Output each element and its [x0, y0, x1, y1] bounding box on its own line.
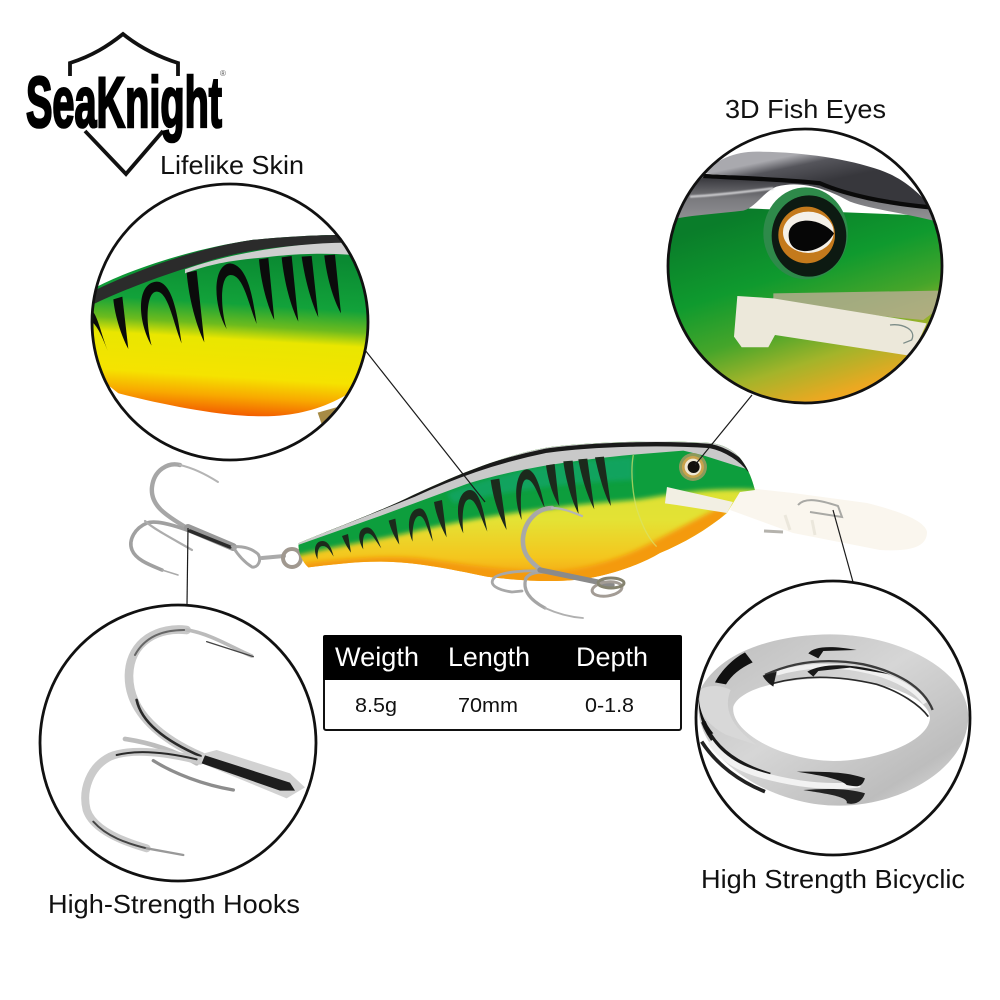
eye green skin	[669, 208, 941, 402]
white mouth tab	[665, 487, 733, 513]
label: Lifelike Skin: Lifelike Skin	[160, 150, 304, 180]
third hook prong	[125, 739, 197, 763]
value: depth: 0-1.8	[585, 695, 634, 717]
header: Length: Length	[448, 642, 530, 672]
eye black line	[703, 176, 930, 207]
header: Depth: Depth	[576, 642, 648, 672]
table header bar	[323, 635, 682, 680]
body stripes	[315, 457, 611, 559]
eye tab seam	[890, 325, 913, 343]
eye gray lower back	[677, 177, 937, 222]
black dorsal line	[301, 444, 750, 539]
eye white tab	[734, 296, 927, 356]
ring end cap shadow	[699, 698, 713, 735]
inset: split ring	[696, 581, 970, 855]
green back band	[293, 437, 760, 557]
eye gray upper back	[703, 152, 932, 208]
upper hook	[129, 630, 202, 757]
ring inner edge line	[773, 677, 928, 717]
skin hook eye detail	[318, 407, 336, 424]
silver back band	[298, 442, 748, 545]
ring lower black marks	[797, 772, 865, 786]
ring lower light band	[710, 742, 860, 786]
value: weight: 8.5g	[355, 695, 397, 717]
translucent diving lip	[730, 487, 927, 550]
eye socket	[763, 187, 848, 279]
ring end cap	[700, 686, 736, 734]
logo: SeaKnight shield: ®	[220, 69, 226, 78]
value: length: 70mm	[458, 695, 518, 717]
eye orange corner	[873, 293, 953, 413]
teal back highlight	[447, 457, 633, 503]
lower hook	[85, 752, 200, 848]
inset: high-strength hooks	[40, 605, 316, 881]
label: High-Strength Hooks: High-Strength Hooks	[48, 889, 300, 919]
ring outer groove	[702, 742, 765, 792]
skin silver band	[185, 243, 356, 273]
inset: 3D fish eye	[660, 129, 953, 413]
belly treble hook and rings	[492, 508, 624, 618]
header: Weigth: Weigth	[335, 642, 419, 672]
ring upper black marks	[808, 647, 857, 658]
ring gap dark	[715, 652, 753, 684]
lure eye	[679, 453, 707, 481]
hook shank	[202, 750, 305, 798]
gill line	[632, 455, 657, 547]
eye silver gleam	[690, 188, 773, 197]
leader lines	[187, 350, 853, 605]
eye mouth translucent band	[773, 291, 938, 320]
rear treble hook	[131, 464, 301, 575]
skin dark back	[94, 235, 342, 304]
ring inner coil highlight	[777, 666, 925, 703]
skin stripes	[92, 255, 341, 354]
inset: lifelike skin	[85, 184, 385, 460]
label: 3D Fish Eyes: 3D Fish Eyes	[725, 94, 886, 124]
ring lower groove	[703, 722, 770, 775]
ring inner coil line	[765, 661, 933, 710]
logo: SeaKnight shield	[26, 34, 226, 174]
logo: SeaKnight shield: SeaKnight	[26, 64, 222, 143]
eye pupil	[789, 221, 834, 251]
orange belly band	[303, 509, 730, 581]
ring metal	[698, 634, 968, 806]
spec table	[323, 635, 682, 730]
label: High Strength Bicyclic: High Strength Bicyclic	[701, 864, 965, 894]
main lure body	[298, 442, 755, 581]
table frame	[324, 636, 681, 730]
skin body	[85, 235, 385, 416]
